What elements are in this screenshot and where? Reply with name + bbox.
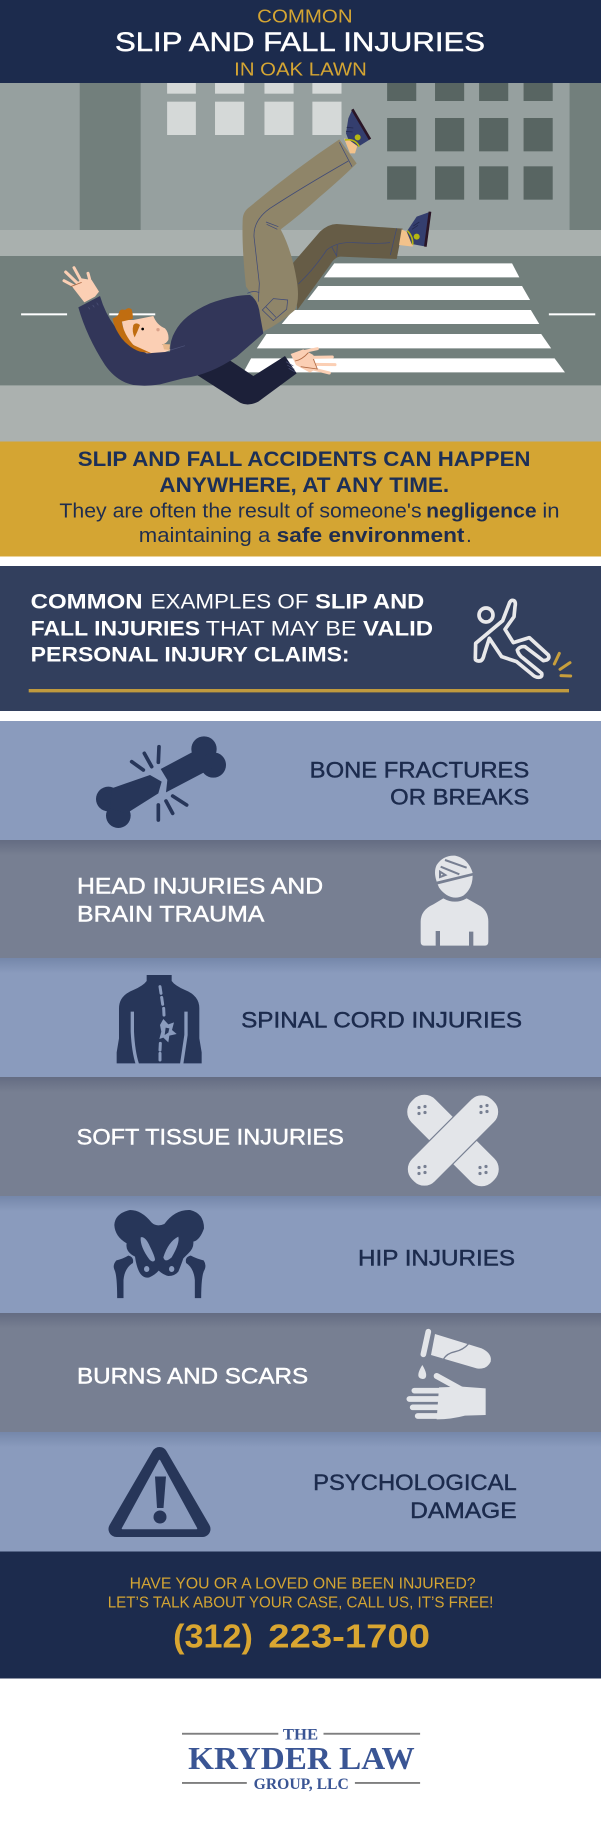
- logo: the kryder law group: [182, 1726, 420, 1793]
- icon: warning triangle: [116, 1455, 202, 1529]
- panel: accident statement: [0, 442, 601, 556]
- street background: [0, 83, 601, 442]
- icon: injured spine: [117, 975, 202, 1064]
- label: burns and scars: BURNS AND SCARS: [77, 1363, 308, 1388]
- icon: crossed bandages: [401, 1089, 505, 1192]
- text: negligence explanation: They are often the result of someone's: [59, 500, 422, 522]
- icon: pelvis: [113, 1210, 206, 1299]
- text: negligence explanation: [59, 500, 560, 547]
- panel: common examples intro: [0, 566, 601, 711]
- logo: the kryder law group: GROUP, LLC: [254, 1776, 349, 1793]
- label: head injuries and brain trauma: HEAD INJURIES AND: [77, 873, 323, 898]
- heading: common examples: FALL INJURIES: [31, 616, 200, 640]
- panel: street illustration: [0, 83, 601, 442]
- icon: slipping person: [475, 600, 571, 677]
- phone number: 223-1700: [268, 1617, 430, 1654]
- label: bone fractures or breaks: [310, 757, 529, 810]
- illustration: falling man legs: [242, 109, 431, 332]
- heading: accidents can happen anywhere: ANYWHERE, AT ANY TIME.: [159, 473, 449, 497]
- text: negligence explanation: in: [542, 500, 560, 522]
- logo: the kryder law group: KRYDER LAW: [188, 1740, 415, 1776]
- label: head injuries and brain trauma: [77, 873, 323, 927]
- illustration: falling man body: [64, 268, 335, 404]
- heading: in oak lawn: IN OAK LAWN: [234, 59, 367, 80]
- label: spinal cord injuries: SPINAL CORD INJURIES: [241, 1008, 522, 1033]
- text: negligence explanation: .: [466, 525, 472, 547]
- label: hip injuries: HIP INJURIES: [358, 1245, 515, 1270]
- text: call to action: LET’S TALK ABOUT YOUR CASE, CALL US, IT’S FREE!: [108, 1594, 493, 1611]
- icon: chemical on hand: [409, 1332, 491, 1419]
- phone number: (312): [173, 1617, 253, 1654]
- heading: common examples: VALID: [363, 616, 433, 640]
- logo: the kryder law group: THE: [283, 1726, 318, 1743]
- label: bone fractures or breaks: OR BREAKS: [390, 785, 529, 810]
- text: negligence explanation: maintaining a: [139, 525, 271, 547]
- heading: accidents can happen anywhere: [78, 447, 531, 497]
- heading: common examples: [31, 590, 433, 667]
- panel: soft tissue injuries: [0, 1077, 601, 1196]
- label: head injuries and brain trauma: BRAIN TRAUMA: [77, 902, 265, 927]
- phone number: [173, 1617, 430, 1654]
- text: call to action: [108, 1575, 493, 1611]
- text: call to action: HAVE YOU OR A LOVED ONE BEEN INJURED?: [130, 1575, 476, 1592]
- heading: common examples: PERSONAL INJURY CLAIMS:: [31, 643, 350, 667]
- label: bone fractures or breaks: BONE FRACTURES: [310, 757, 529, 782]
- heading: common: COMMON: [257, 6, 353, 27]
- title: slip and fall injuries: SLIP AND FALL INJURIES: [115, 27, 485, 57]
- label: psychological damage: PSYCHOLOGICAL: [313, 1470, 517, 1495]
- heading: common examples: THAT MAY BE: [206, 616, 356, 640]
- label: soft tissue injuries: SOFT TISSUE INJURIES: [77, 1124, 344, 1149]
- panel: call to action: [0, 1552, 601, 1678]
- label: psychological damage: [313, 1470, 517, 1523]
- panel: psychological damage: [0, 1432, 601, 1552]
- heading: accidents can happen anywhere: SLIP AND FALL ACCIDENTS CAN HAPPEN: [78, 447, 531, 471]
- panel: burns and scars: [0, 1313, 601, 1432]
- panel: spinal cord injuries: [0, 958, 601, 1077]
- text: negligence explanation: safe environment: [277, 525, 465, 547]
- label: psychological damage: DAMAGE: [410, 1498, 517, 1523]
- text: negligence explanation: negligence: [426, 500, 537, 522]
- heading: common examples: SLIP AND: [315, 590, 424, 614]
- panel: hip injuries: [0, 1196, 601, 1313]
- icon: broken bone: [96, 736, 226, 828]
- heading: common examples: COMMON: [31, 590, 143, 614]
- panel: head injuries: [0, 840, 601, 958]
- icon: bandaged head: [421, 856, 488, 946]
- panel: title header: [0, 0, 601, 83]
- panel: bone fractures: [0, 721, 601, 840]
- heading: common examples: EXAMPLES OF: [151, 590, 308, 614]
